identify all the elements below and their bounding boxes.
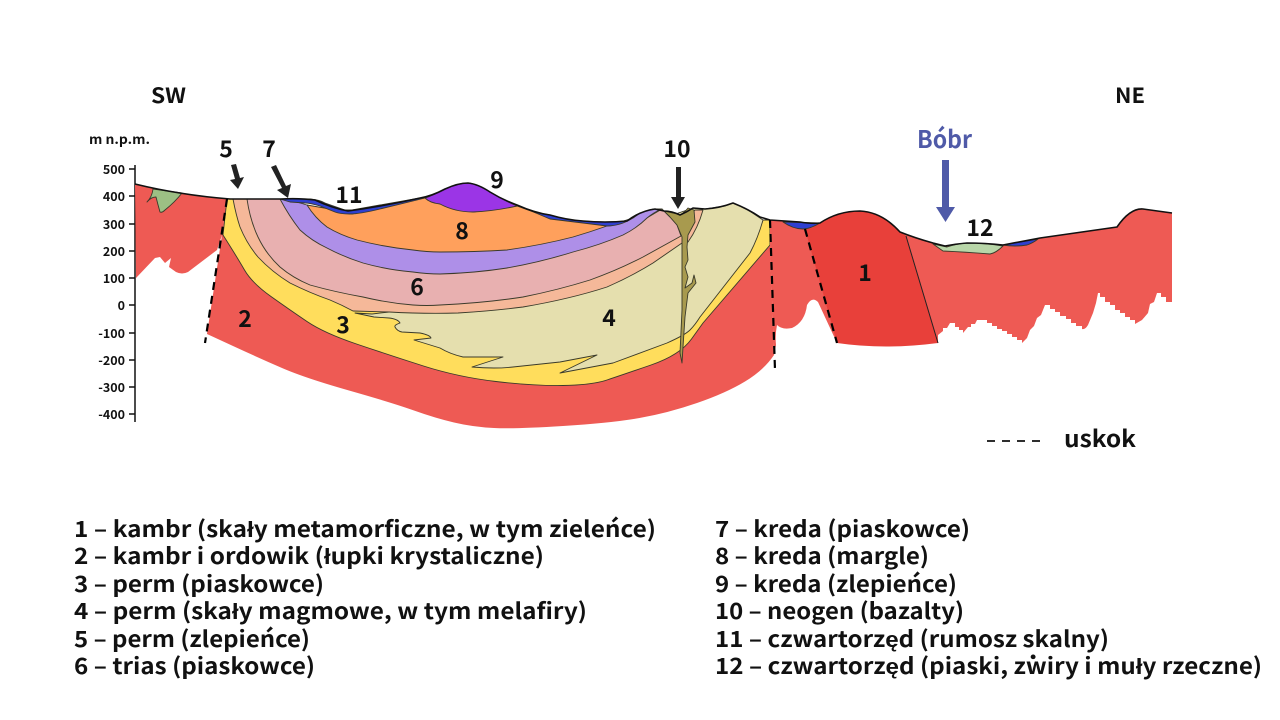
legend left column: 1 – kambr (skały metamorficzne, w tym zieleńce) — [74, 512, 656, 544]
elevation axis: 500 — [103, 159, 125, 178]
fault legend: uskok — [1064, 420, 1136, 454]
elevation axis: 300 — [103, 214, 125, 233]
layer 1: kambr block — [805, 211, 938, 346]
geological cross-section — [135, 183, 1172, 428]
layer 12: river sediments — [933, 243, 1003, 254]
fault lines — [205, 199, 837, 370]
legend right column: 12 – czwartorzęd (piaski, żwiry i muły rzeczne) — [715, 649, 1262, 681]
legend right column: 9 – kreda (zlepieńce) — [715, 567, 957, 599]
elevation axis: -400 — [98, 404, 125, 423]
layer 3: perm sandstone — [223, 199, 770, 386]
layer 9: kreda conglomerate — [425, 183, 517, 212]
arrow to 5 — [230, 164, 244, 189]
layer 5: salmon band — [233, 199, 703, 313]
layer 6: trias sandstone — [247, 199, 681, 306]
layer 10: basalt dyke — [664, 208, 696, 363]
numbers on section: 5 — [219, 130, 233, 164]
numbers on section: 1 — [858, 254, 872, 288]
numbers on section: 2 — [238, 300, 252, 334]
legend right column: 11 – czwartorzęd (rumosz skalny) — [715, 622, 1109, 654]
numbers on section: 12 — [966, 209, 994, 243]
layer 11: blue patch near river — [1003, 239, 1038, 246]
numbers on section: 8 — [455, 212, 469, 246]
right red rock block — [770, 209, 1172, 355]
numbers on section — [219, 130, 994, 340]
legend right column: 8 – kreda (margle) — [715, 539, 929, 571]
label: SW direction: SW — [151, 80, 186, 110]
legend left column: 5 – perm (zlepieńce) — [74, 622, 310, 654]
legend right column: 10 – neogen (bazalty) — [715, 594, 964, 626]
label: NE direction: NE — [1115, 80, 1145, 110]
legend left column: 3 – perm (piaskowce) — [74, 567, 324, 599]
green patch — [147, 189, 182, 212]
layer 8: kreda marl — [307, 198, 607, 252]
legend left column: 2 – kambr i ordowik (łupki krystaliczne) — [74, 539, 544, 571]
elevation axis — [89, 129, 150, 423]
elevation axis: -300 — [98, 377, 125, 396]
numbers on section: 9 — [490, 161, 504, 195]
legend left column — [74, 512, 656, 681]
numbers on section: 3 — [336, 306, 350, 340]
layer 7: kreda sandstone — [280, 199, 662, 274]
elevation axis: -200 — [98, 350, 125, 369]
arrow to 10 — [671, 167, 685, 209]
layer 4: perm magmatic rock — [355, 203, 763, 373]
elevation axis: m n.p.m. — [89, 129, 150, 148]
legend left column: 6 – trias (piaskowce) — [74, 649, 315, 681]
numbers on section: 10 — [663, 130, 691, 164]
elevation axis: 0 — [118, 295, 125, 314]
layer 2: kambr i ordowik — [207, 199, 774, 428]
layer 11: blue debris strip middle — [517, 205, 640, 226]
elevation axis: 200 — [103, 241, 125, 260]
layer 11: blue patch near fault — [783, 222, 820, 229]
arrow to 7 — [271, 165, 291, 198]
numbers on section: 7 — [262, 130, 276, 164]
elevation axis: 100 — [103, 268, 125, 287]
left red rock block — [135, 184, 227, 278]
numbers on section: 6 — [410, 268, 424, 302]
arrow: river Bóbr — [936, 160, 955, 222]
elevation axis: -100 — [98, 323, 125, 342]
legend left column: 4 – perm (skały magmowe, w tym melafiry) — [74, 594, 587, 626]
legend right column: 7 – kreda (piaskowce) — [715, 512, 970, 544]
legend right column — [715, 512, 1262, 681]
terrain surface line — [135, 183, 1172, 246]
layer 11: blue debris strip left — [280, 198, 425, 214]
elevation axis: 400 — [103, 186, 125, 205]
numbers on section: 4 — [602, 299, 616, 333]
river name: Bóbr — [917, 120, 973, 155]
numbers on section: 11 — [335, 176, 363, 210]
